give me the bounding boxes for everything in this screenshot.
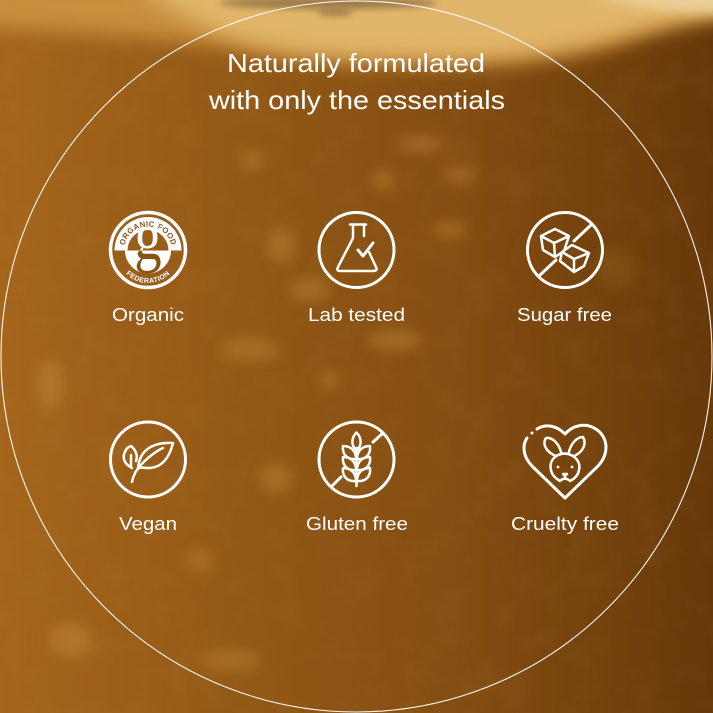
label: Vegan: Vegan: [119, 514, 177, 534]
label: Cruelty free: Cruelty free: [511, 514, 619, 534]
icon: crossed wheat: [319, 422, 394, 497]
label: Organic: Organic: [112, 305, 184, 325]
icon: leaves: [110, 422, 186, 497]
item: Organic: [108, 210, 188, 325]
icon: rabbit in heart: [524, 425, 606, 498]
icon: organic food federation badge: g: [134, 199, 162, 274]
icon: organic food federation badge: [108, 210, 188, 290]
icon: crossed sugar cubes: [528, 212, 602, 288]
title: [208, 48, 505, 115]
item: Lab tested: [308, 212, 405, 325]
label: Sugar free: Sugar free: [517, 305, 612, 325]
label: Lab tested: Lab tested: [308, 305, 405, 325]
icon: organic food federation badge: ORGANIC FOOD: [120, 221, 176, 245]
item: Sugar free: [517, 212, 612, 325]
icon: flask with check: [319, 212, 394, 288]
item: Gluten free: [306, 422, 408, 534]
item: Cruelty free: [511, 425, 619, 534]
title: with only the essentials: [208, 85, 505, 115]
label: Gluten free: Gluten free: [306, 514, 408, 534]
title: Naturally formulated: [227, 48, 485, 78]
icon: organic food federation badge: g: [134, 199, 162, 274]
icon: organic food federation badge: FEDERATION: [126, 270, 170, 283]
item: Vegan: [110, 422, 186, 534]
